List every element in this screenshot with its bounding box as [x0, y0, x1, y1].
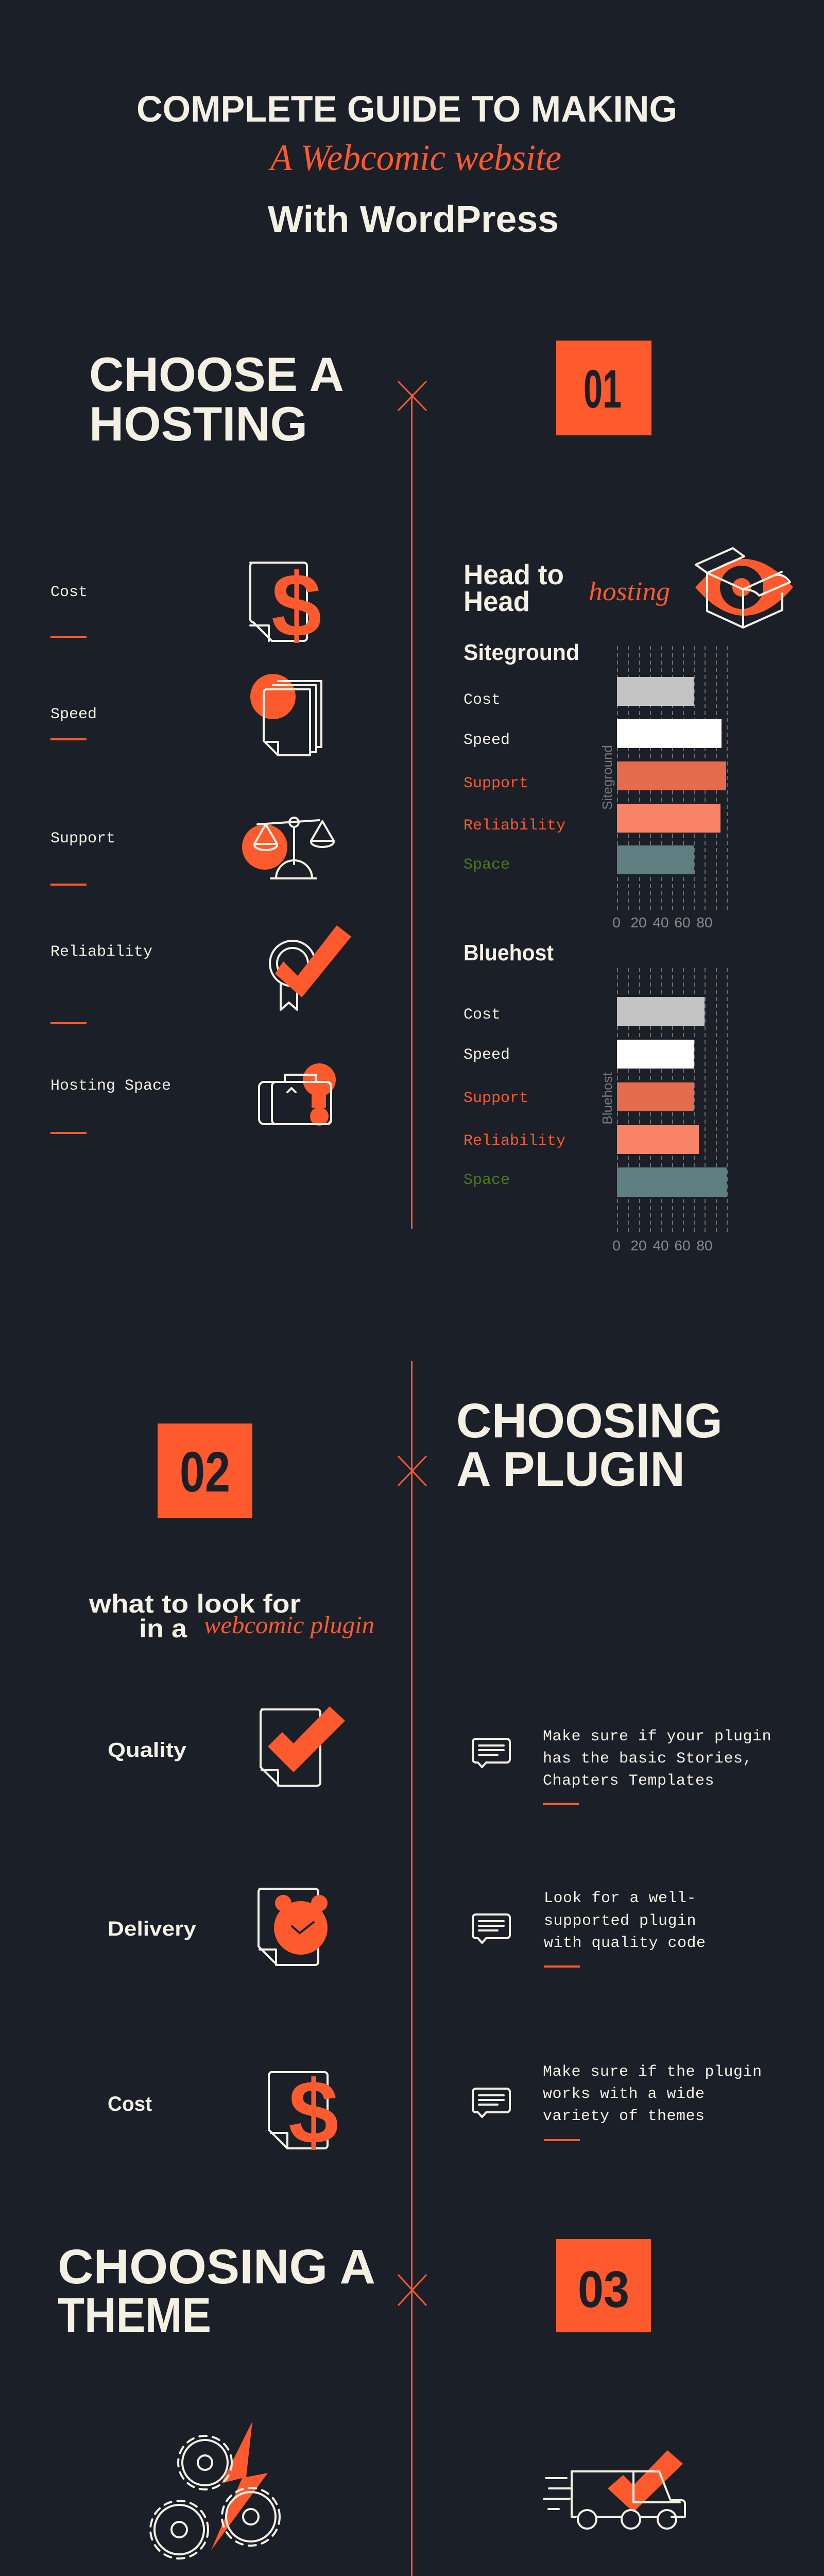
chart: bluehost: Bluehost	[599, 1072, 615, 1125]
chart: bluehost: Space	[464, 1172, 510, 1189]
label: hosting space	[50, 1077, 171, 1134]
icon: cost document: $	[271, 555, 321, 656]
theme item: compatibility	[80, 2421, 356, 2576]
chart: siteground: 0	[612, 914, 621, 930]
heading: choose a hosting	[89, 347, 344, 451]
plugin tip 3: works with a wide	[543, 2086, 705, 2103]
label: reliability: Reliability	[50, 943, 152, 961]
plugin criterion: quality	[108, 1706, 345, 1786]
heading: choosing a theme	[58, 2240, 375, 2343]
plugin tip 1: has the basic Stories,	[543, 1750, 752, 1768]
icon: truck	[544, 2450, 685, 2529]
heading: choosing a theme: THEME	[58, 2288, 211, 2343]
label: hosting space: Hosting Space	[50, 1077, 171, 1095]
x mark 3	[398, 2275, 426, 2306]
chart: bluehost: Reliability	[464, 1132, 565, 1150]
subheading: what to look for: webcomic plugin	[204, 1612, 374, 1639]
plugin criterion: cost: Cost	[108, 2093, 152, 2115]
label: reliability	[50, 943, 152, 1024]
label: cost: Cost	[50, 584, 88, 601]
heading: choosing a plugin: A PLUGIN	[456, 1442, 685, 1497]
title: COMPLETE GUIDE TO MAKING	[136, 89, 677, 130]
x mark 1	[398, 381, 426, 411]
plugin tip 3	[473, 2063, 762, 2141]
chart: siteground: Siteground	[464, 640, 579, 665]
head to head heading: hosting	[589, 577, 670, 606]
number box 03: 03	[578, 2261, 629, 2318]
plugin tip 2: Look for a well-	[544, 1890, 696, 1907]
chart: bluehost: 60	[674, 1238, 691, 1253]
chart: bluehost	[464, 940, 727, 1253]
heading: choosing a plugin: CHOOSING	[456, 1394, 723, 1448]
chart: bluehost: Speed	[464, 1046, 510, 1064]
plugin criterion: cost	[108, 2062, 338, 2163]
plugin tip 1: Make sure if your plugin	[543, 1728, 771, 1745]
icon: support scales	[242, 818, 334, 878]
subheading: what to look for: what to look for	[89, 1589, 301, 1618]
x mark 2	[398, 1456, 426, 1486]
plugin tip 2	[473, 1890, 706, 1968]
chart: siteground: 60	[674, 914, 691, 930]
title: With WordPress	[268, 199, 559, 240]
heading: choosing a theme: CHOOSING A	[58, 2240, 375, 2294]
chart: siteground: 80	[696, 914, 713, 930]
label: speed	[50, 706, 97, 740]
label: cost	[50, 584, 88, 638]
heading: choosing a plugin	[456, 1394, 723, 1497]
icon: hosting space briefcase	[259, 1063, 336, 1126]
chart: siteground: Reliability	[464, 817, 565, 835]
icon: speed documents	[250, 674, 321, 755]
chart: bluehost: Support	[464, 1090, 528, 1107]
plugin tip 1: Chapters Templates	[543, 1772, 714, 1790]
head to head heading: Head	[464, 585, 530, 617]
chart: siteground: Siteground	[599, 745, 615, 810]
plugin tip 2: supported plugin	[544, 1912, 696, 1930]
theme item: customisability	[470, 2450, 746, 2576]
chart: siteground: 40	[653, 914, 669, 930]
number box 03	[556, 2239, 651, 2332]
heading: choose a hosting: CHOOSE A	[89, 347, 344, 401]
timeline line	[411, 394, 413, 2576]
chart: bluehost: Bluehost	[464, 940, 554, 965]
plugin tip 2: with quality code	[544, 1935, 706, 1952]
chart: siteground	[464, 640, 727, 930]
plugin tip 1	[473, 1728, 771, 1805]
label: support	[50, 830, 115, 886]
number box 01	[556, 341, 651, 435]
title	[136, 89, 677, 240]
icon: gears	[150, 2421, 280, 2558]
plugin tip 3: variety of themes	[543, 2108, 705, 2125]
label: support: Support	[50, 830, 115, 848]
chart: bluehost: 20	[630, 1238, 647, 1253]
plugin criterion: quality: Quality	[108, 1739, 187, 1761]
chart: bluehost: 80	[696, 1238, 713, 1253]
chart: bluehost: 40	[653, 1238, 669, 1253]
subheading: what to look for	[89, 1589, 374, 1643]
chart: siteground: Speed	[464, 732, 510, 749]
head to head heading: Head to	[464, 558, 564, 590]
icon: box with eye	[695, 548, 793, 628]
heading: choose a hosting: HOSTING	[89, 397, 307, 451]
hosting criteria list	[50, 584, 171, 1134]
label: speed: Speed	[50, 706, 97, 723]
chart: siteground: Support	[464, 775, 528, 792]
plugin criterion: delivery: Delivery	[108, 1918, 197, 1940]
chart: siteground: 20	[630, 914, 647, 930]
chart: siteground: Cost	[464, 691, 501, 709]
number box 01: 01	[583, 359, 622, 419]
number box 02: 02	[180, 1440, 230, 1504]
plugin criterion: cost: $	[288, 2062, 338, 2163]
chart: bluehost: Cost	[464, 1006, 501, 1024]
icon: reliability badge	[270, 925, 351, 1010]
chart: siteground: Space	[464, 856, 510, 874]
plugin tip 3: Make sure if the plugin	[543, 2063, 762, 2081]
number box 02	[158, 1423, 252, 1518]
head to head heading	[464, 558, 670, 617]
title: A Webcomic website	[268, 137, 561, 178]
chart: bluehost: 0	[612, 1238, 621, 1253]
plugin criterion: delivery	[108, 1889, 328, 1965]
subheading: what to look for: in a	[139, 1614, 187, 1643]
